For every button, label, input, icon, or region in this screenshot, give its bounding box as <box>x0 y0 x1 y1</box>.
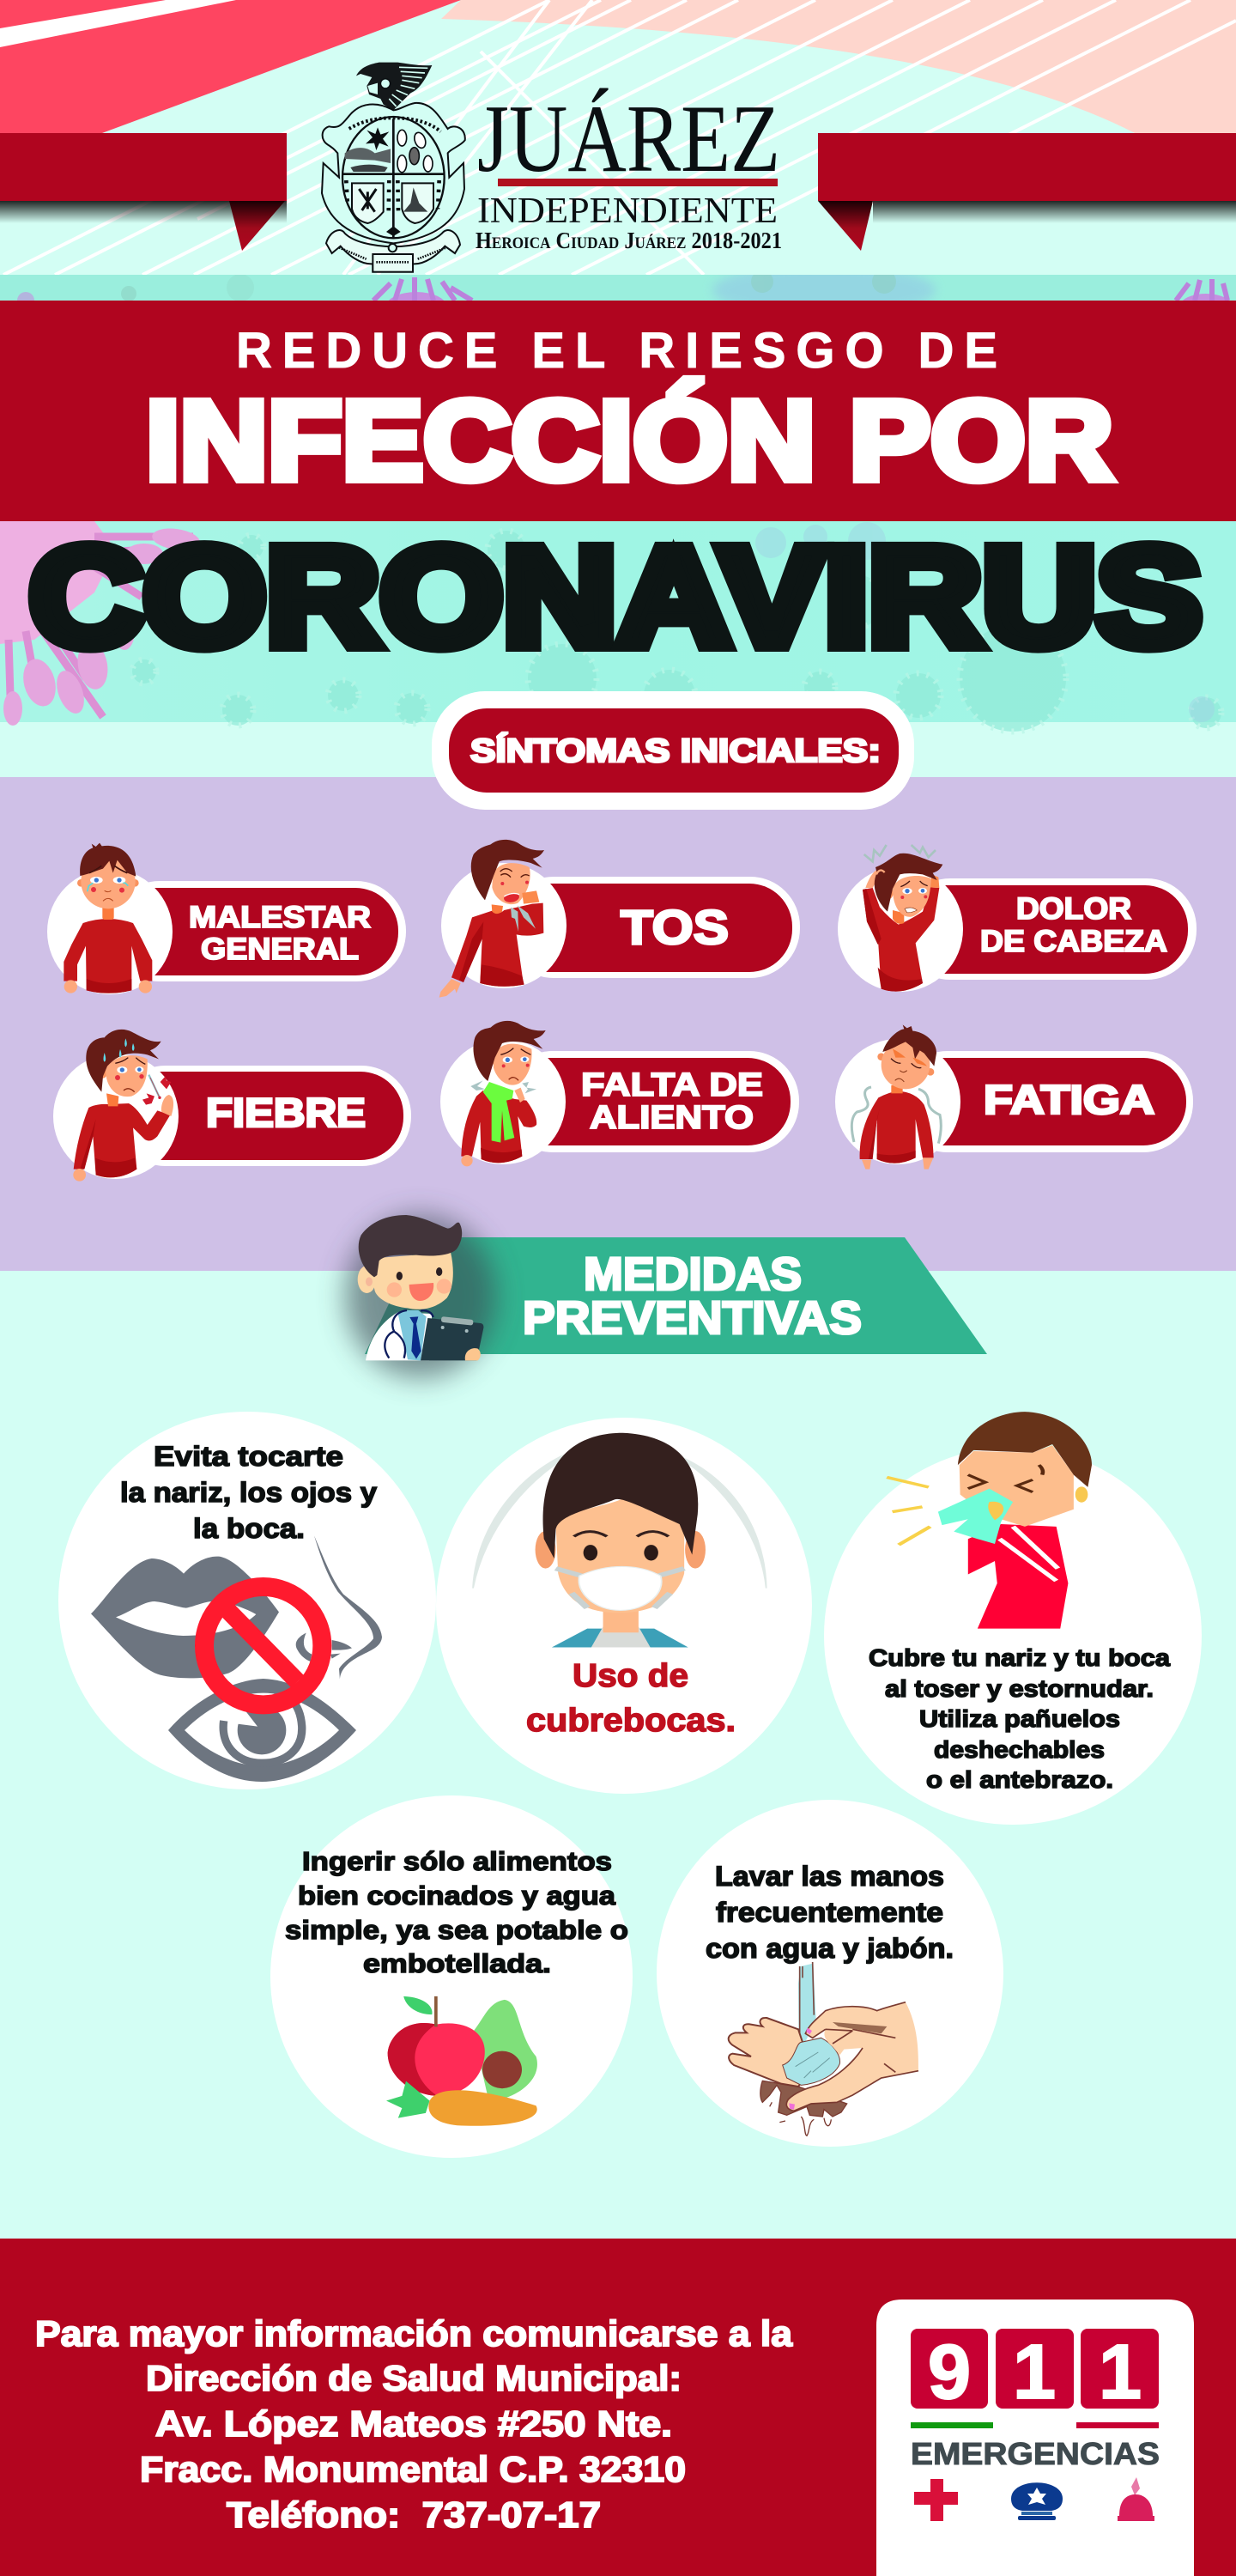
label line 2: GENERAL <box>201 933 359 966</box>
label: DOLOR <box>1016 892 1131 926</box>
text: bien cocinados y agua <box>298 1880 616 1911</box>
digit boxes: 9 <box>928 2330 971 2415</box>
icon: washing hands <box>729 1962 918 2136</box>
contact text: Para mayor información comunicarse a la <box>35 2313 793 2354</box>
text: deshechables <box>934 1736 1105 1763</box>
symptom: malestar general <box>47 843 406 994</box>
label: MALESTAR <box>189 901 371 934</box>
text <box>706 1861 954 1964</box>
ribbon left <box>0 133 287 251</box>
title line 1: REDUCE EL RIESGO DE <box>236 323 997 379</box>
footer panel <box>0 2239 1236 2576</box>
label: FIEBRE <box>206 1090 366 1135</box>
label: FALTA DE <box>581 1067 763 1103</box>
shield frame <box>322 103 465 243</box>
illustration: pink virus <box>0 521 201 726</box>
text: cubrebocas. <box>526 1703 736 1739</box>
logo wordmark <box>476 86 782 253</box>
label line 2: DE CABEZA <box>980 925 1167 958</box>
text <box>526 1658 736 1739</box>
label line 2: ALIENTO <box>590 1100 754 1136</box>
text: con agua y jabón. <box>706 1933 954 1964</box>
panel: alimentos <box>270 1795 633 2158</box>
text <box>869 1644 1170 1793</box>
icon: boy sneezing <box>887 1412 1092 1629</box>
contact text: Dirección de Salud Municipal: <box>146 2358 682 2398</box>
text: Evita tocarte <box>154 1441 343 1472</box>
logo: municipal coat of arms <box>322 63 465 272</box>
contact text: Fracc. Monumental C.P. 32310 <box>140 2449 686 2489</box>
banner <box>365 1237 987 1354</box>
symptom: fatiga <box>835 1024 1193 1170</box>
text: la nariz, los ojos y <box>120 1477 377 1508</box>
icon: police cap <box>1011 2482 1063 2520</box>
panel: symptoms background <box>0 777 1236 1271</box>
digit boxes: 1 <box>1099 2330 1142 2415</box>
label: TOS <box>621 900 729 954</box>
digit boxes: 1 <box>1013 2330 1056 2415</box>
text: Cubre tu nariz y tu boca <box>869 1644 1170 1671</box>
icon: doctor <box>358 1215 483 1360</box>
icon: lips nose eye with prohibited sign <box>91 1535 382 1782</box>
icon: fruit and vegetables <box>386 1996 537 2126</box>
heading: medidas preventivas <box>345 1215 987 1378</box>
icon: tired boy <box>851 1024 941 1170</box>
motto scroll <box>326 230 460 272</box>
text: frecuentemente <box>716 1897 943 1928</box>
coronavirus band <box>0 518 1236 732</box>
icon: boy short of breath <box>461 1021 546 1166</box>
text: al toser y estornudar. <box>885 1675 1154 1702</box>
icon: boy coughing <box>439 840 544 998</box>
contact text: Av. López Mateos #250 Nte. <box>155 2403 672 2444</box>
emergencias label: EMERGENCIAS <box>911 2436 1160 2471</box>
text <box>285 1846 628 1978</box>
text: simple, ya sea potable o <box>285 1915 628 1945</box>
title banner <box>0 301 1236 521</box>
text: Utiliza pañuelos <box>919 1705 1120 1732</box>
panel: lavado de manos <box>657 1800 1003 2147</box>
icon: boy feeling unwell <box>64 843 152 993</box>
wordmark: government period: Heroica Ciudad Juárez 2018-2021 <box>476 228 782 253</box>
text: Ingerir sólo alimentos <box>302 1846 612 1876</box>
icon: red cross <box>914 2479 958 2521</box>
text: embotellada. <box>363 1948 551 1978</box>
text: la boca. <box>193 1513 305 1544</box>
contact text: Teléfono: 737-07-17 <box>227 2494 601 2535</box>
illustration: blue viruses <box>755 522 1215 722</box>
icon: boy with fever <box>73 1030 173 1182</box>
ribbon right <box>818 133 1236 251</box>
heading text line 2: PREVENTIVAS <box>523 1292 862 1344</box>
header background <box>0 0 1236 275</box>
virus strip behind title <box>0 275 1236 301</box>
panel: cubrir al toser <box>824 1412 1202 1825</box>
symptom: tos <box>439 840 800 998</box>
symptom: falta de aliento <box>440 1021 799 1166</box>
symptom: fiebre <box>53 1030 411 1182</box>
doctor shadow <box>345 1215 496 1378</box>
digit boxes <box>911 2329 1159 2415</box>
icon: boy with mask <box>473 1433 766 1647</box>
panel: cubrebocas <box>436 1418 812 1794</box>
title word: coronavirus: CORONAVIRUS <box>29 518 1202 675</box>
heading text: MEDIDAS <box>584 1249 802 1300</box>
illustration: faint background viruses <box>132 531 1221 732</box>
heading: initial symptoms: SÍNTOMAS INICIALES: <box>470 732 881 769</box>
text: Lavar las manos <box>715 1861 944 1892</box>
wordmark: INDEPENDIENTE: INDEPENDIENTE <box>477 191 778 231</box>
panel: no tocar rostro <box>58 1412 436 1789</box>
text: Uso de <box>573 1658 688 1694</box>
911 card <box>876 2300 1194 2576</box>
wordmark: JUÁREZ: JUÁREZ <box>477 86 780 192</box>
icon: firefighter helmet <box>1118 2477 1154 2521</box>
symptom: dolor de cabeza <box>838 845 1197 992</box>
title line 2: INFECCIÓN POR <box>146 377 1113 503</box>
label: FATIGA <box>984 1077 1154 1122</box>
contact text <box>35 2313 793 2535</box>
icon: eagle warrior crest <box>356 63 432 110</box>
shield quarters <box>345 127 439 236</box>
text: o el antebrazo. <box>926 1766 1113 1793</box>
heading: initial symptoms <box>432 691 914 810</box>
text <box>120 1441 377 1544</box>
icon: boy with headache <box>863 845 942 992</box>
